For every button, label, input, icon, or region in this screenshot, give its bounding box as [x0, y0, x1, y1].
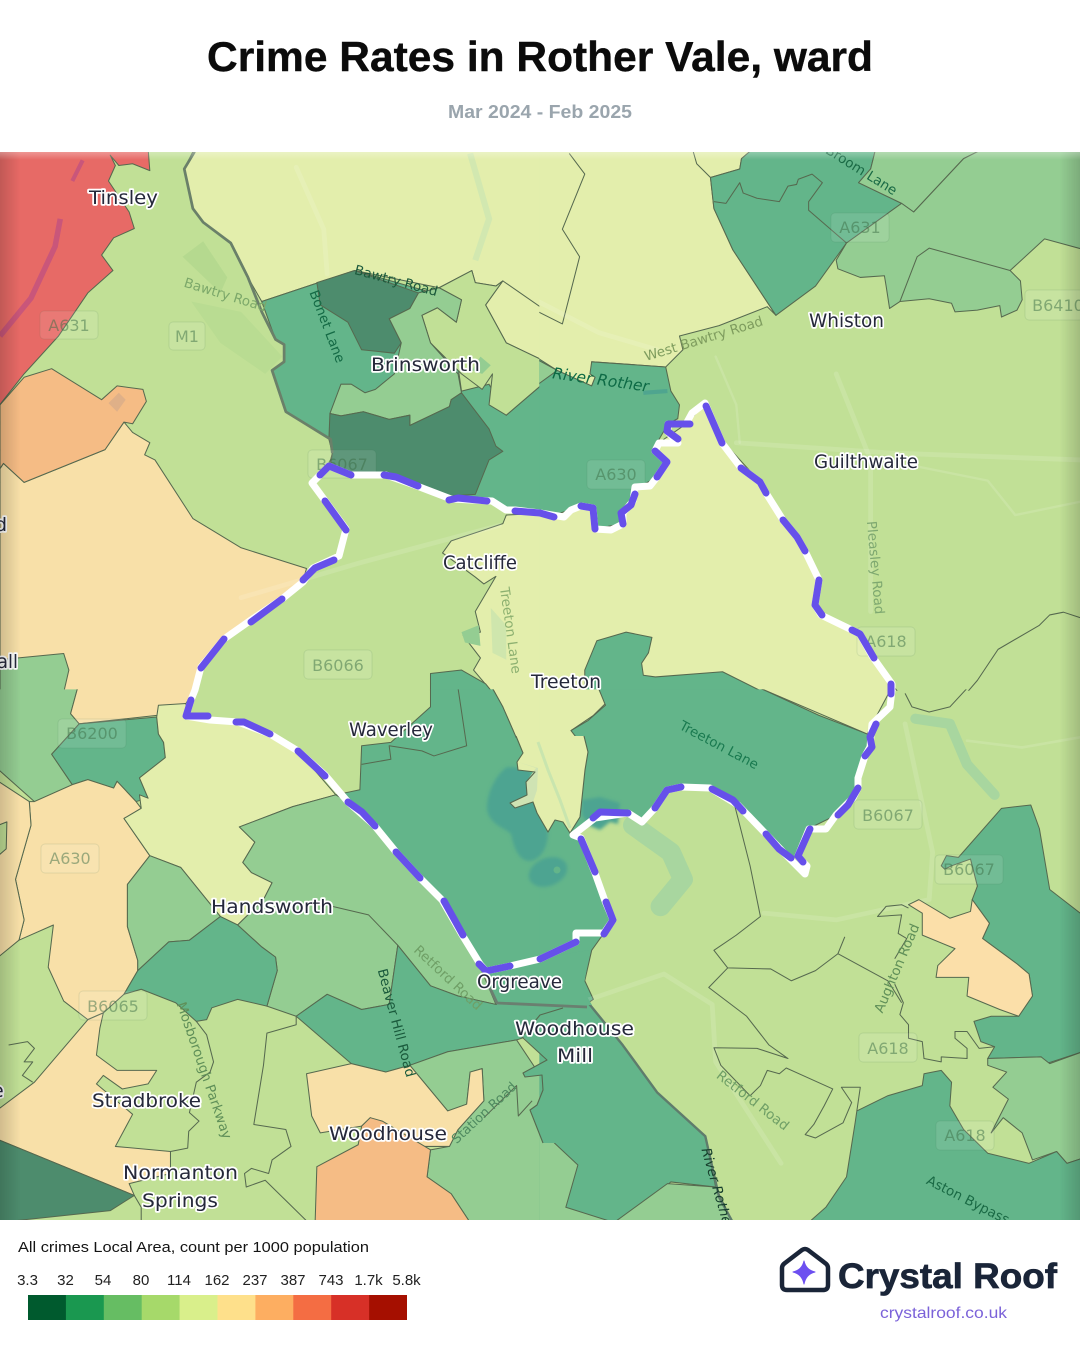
north-east quadrant [538, 148, 1080, 692]
place labels: Whiston [809, 310, 884, 332]
legend values: 32 [57, 1272, 74, 1289]
area: cream north [71, 688, 195, 724]
lake oval [524, 852, 572, 892]
place labels: Mill [557, 1045, 593, 1067]
legend title: All crimes Local Area, count per 1000 population [18, 1239, 369, 1256]
road labels: Mosborough Parkway [173, 1000, 235, 1141]
place labels: Catcliffe [443, 552, 517, 574]
road shields: B6067 [316, 455, 368, 474]
place labels: Orgreave [477, 971, 562, 993]
area: cream Aughton [909, 900, 1032, 1016]
Woodhouse Mill west edge [522, 1008, 563, 1143]
area: light north [184, 148, 542, 360]
road labels: Pleasley Road [863, 520, 887, 615]
area: dark Normanton [0, 1140, 134, 1223]
area: green eastern edge [941, 805, 1080, 1064]
place labels: Normanton [123, 1162, 238, 1184]
title: Mar 2024 - Feb 2025 [448, 101, 632, 122]
area: cream Woodhouse [307, 1064, 484, 1146]
area: dark green centre [124, 917, 277, 1021]
road shields: A618 [865, 632, 907, 651]
place labels: Stradbroke [92, 1090, 201, 1112]
road shields: A631 [839, 218, 881, 237]
area: Brinsworth light green [330, 288, 461, 426]
road labels: River Rother [551, 364, 652, 396]
area: light Catcliffe [443, 513, 542, 692]
area: green south-west [0, 654, 69, 692]
north-west quadrant [0, 148, 542, 692]
road shields: A631 [48, 316, 90, 335]
road shields [40, 213, 1080, 1150]
road shields: A618 [867, 1039, 909, 1058]
place labels [0, 187, 918, 1212]
road shields: B6066 [312, 656, 364, 675]
road shields: A630 [595, 465, 637, 484]
area: cream south-west diagonal [0, 1013, 170, 1195]
road labels: Retford Road [713, 1068, 792, 1134]
area: light ward corner [760, 688, 891, 734]
Orgreave wedge green [486, 950, 592, 1005]
road shields: B6200 [66, 724, 118, 743]
area: green west [0, 688, 79, 802]
area: cream A630 [15, 780, 150, 1020]
title [207, 33, 873, 122]
River Rother boundary [588, 1003, 733, 1223]
teal stream beside ward corner [582, 797, 620, 830]
boundary white line [186, 403, 892, 971]
lake [487, 767, 548, 861]
ward boundary [186, 403, 892, 971]
legend values [17, 1272, 421, 1289]
area: green Handsworth east [238, 795, 496, 1016]
area: green south of Orgreave [296, 945, 542, 1072]
legend values: 5.8k [392, 1272, 421, 1289]
logo [780, 1246, 1058, 1322]
road labels: Treeton Lane [676, 717, 761, 773]
river boundary [184, 152, 332, 453]
place labels: Waverley [349, 719, 433, 741]
legend values: 387 [280, 1272, 306, 1289]
logo wordmark: Crystal Roof [838, 1257, 1057, 1296]
area: Treeton green [571, 688, 872, 858]
Treeton light strip [510, 736, 588, 833]
area: Treeton green north [585, 632, 764, 692]
area: Waverley ward green [336, 688, 542, 971]
area: Waverley ward green [538, 820, 613, 960]
area: light green north-east [859, 148, 984, 212]
road labels: Station Road [449, 1080, 520, 1147]
place labels: Treeton [530, 671, 601, 693]
area: Brinsworth mid green [422, 271, 542, 415]
area: green Handsworth west [127, 856, 220, 971]
road shields: B6067 [862, 806, 914, 825]
area: light green east [988, 1052, 1080, 1163]
legend values: 54 [95, 1272, 111, 1289]
legend values: 3.3 [17, 1272, 38, 1289]
area: light ward east [538, 403, 898, 692]
area: green upper Whiston [710, 148, 902, 315]
map base [0, 152, 1080, 1220]
area: green B6200 [52, 717, 165, 802]
map edge shading [0, 152, 1080, 1220]
area: orange Woodhouse [315, 1118, 470, 1223]
boundary purple dashes [186, 406, 891, 971]
area: green south-east [410, 1040, 542, 1223]
Waverley lake patch [505, 738, 592, 840]
area: light ward west edge [492, 689, 540, 736]
legend values: 743 [318, 1272, 344, 1289]
legend colour scale [28, 1295, 407, 1320]
road labels: Bonet Lane [306, 288, 348, 365]
area: light Handsworth [124, 704, 336, 925]
road labels: Bawtry Road [182, 275, 268, 315]
road labels: Beaver Hill Road [374, 967, 418, 1079]
legend values: 162 [204, 1272, 230, 1289]
green patch [633, 825, 683, 906]
road labels: Aughton Road [871, 921, 923, 1015]
road labels: Retford Road [410, 942, 485, 1014]
logo url: crystalroof.co.uk [880, 1305, 1008, 1322]
south-west quadrant [0, 688, 542, 1223]
Woodhouse Mill west fill [523, 1010, 560, 1143]
road shields: A618 [944, 1126, 986, 1145]
area: Brinsworth green [262, 271, 542, 520]
place labels: Woodhouse [329, 1123, 447, 1145]
area: Brinsworth dark north [317, 271, 418, 353]
area: green south-east [809, 1070, 1080, 1223]
area: light north [538, 148, 776, 386]
legend values: 1.7k [354, 1272, 383, 1289]
area: Brinsworth dark south [329, 393, 503, 496]
place labels: Springs [142, 1190, 218, 1212]
area: light Treeton [538, 688, 605, 835]
road shields: B6067 [943, 860, 995, 879]
legend values: 114 [167, 1272, 191, 1289]
area: Rother green [538, 358, 679, 529]
choropleth areas [0, 148, 1080, 1223]
road labels: West Bawtry Road [643, 314, 765, 365]
place labels: Brinsworth [371, 354, 480, 376]
title: Crime Rates in Rother Vale, ward [207, 33, 873, 80]
area: Woodhouse Mill green [538, 1003, 716, 1223]
legend values: 80 [133, 1272, 149, 1289]
area: red Tinsley [0, 148, 150, 407]
area: cream west [0, 422, 307, 692]
legend [17, 1239, 421, 1320]
icon: house with star [782, 1249, 828, 1290]
place labels: Guilthwaite [814, 451, 918, 473]
road labels [173, 142, 1012, 1233]
Orgreave grey boundary [490, 988, 587, 1007]
legend values: 237 [242, 1272, 268, 1289]
place labels: Tinsley [88, 187, 158, 209]
road shields: B6065 [87, 997, 139, 1016]
south-east quadrant [538, 688, 1080, 1223]
road labels: Bawtry Road [353, 262, 439, 300]
area: orange [0, 369, 146, 482]
place labels: Handsworth [211, 896, 333, 918]
road shields: M1 [175, 327, 199, 346]
road shields: A630 [49, 849, 91, 868]
place labels: Woodhouse [515, 1018, 634, 1040]
road labels: Treeton Lane [496, 585, 524, 675]
